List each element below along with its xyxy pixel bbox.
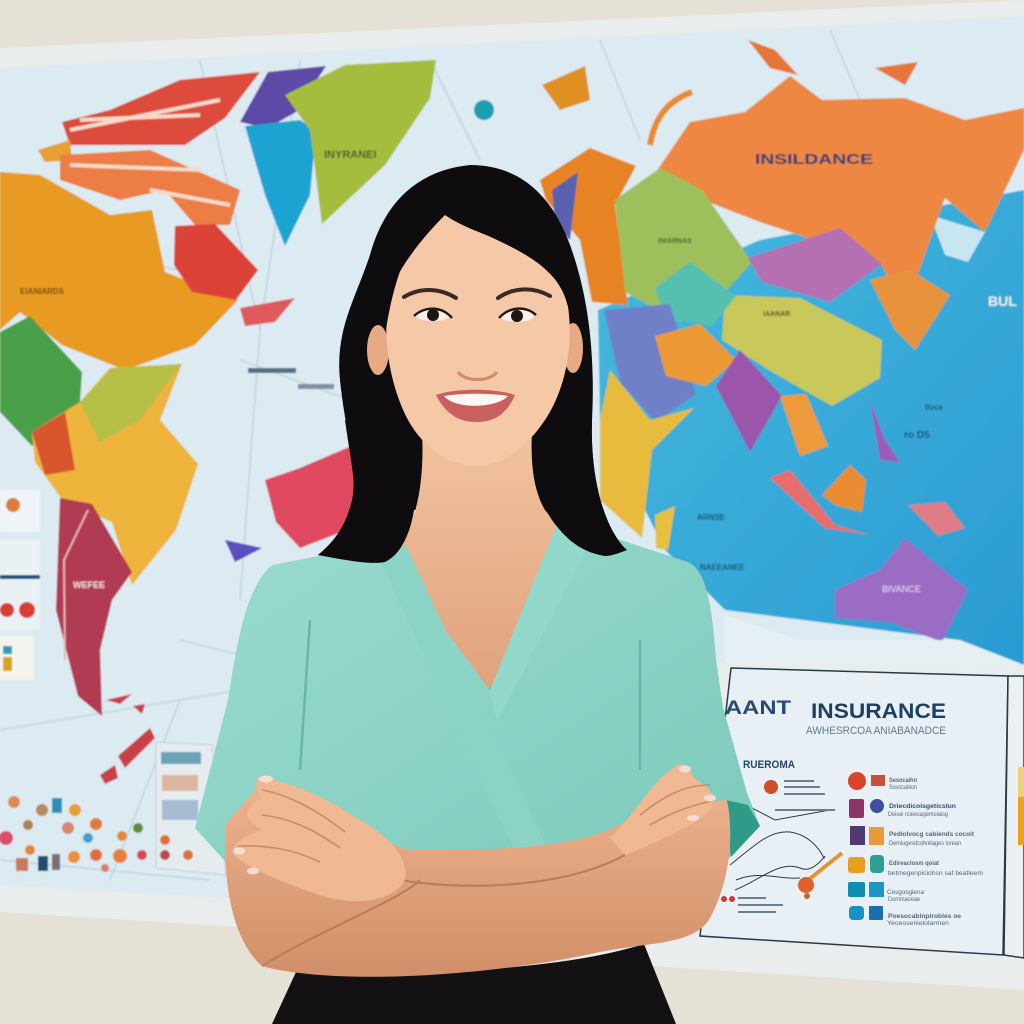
row captions xyxy=(887,777,984,927)
region: pale north-east coast xyxy=(930,215,985,262)
left column icons and captions xyxy=(721,780,835,913)
panel subheading: AWHESRCOA ANIABANADCE xyxy=(806,725,946,737)
illustration: sketch map with brush xyxy=(730,808,842,899)
ocean east xyxy=(598,190,1024,665)
ocean labels: Ilvce xyxy=(925,403,943,412)
ocean labels: BUL xyxy=(988,293,1017,309)
ear right xyxy=(563,323,583,373)
sleeve inner shadow xyxy=(726,800,760,857)
region: Australia purple: BIVANCE xyxy=(882,584,921,594)
region: south America maroon xyxy=(56,498,132,716)
region: Scandinavia blue xyxy=(552,172,578,240)
region: north red stripes xyxy=(38,72,260,225)
hair lock right xyxy=(532,420,627,556)
region: left orange continent: EIANIARDS xyxy=(20,287,65,296)
region: Europe orange xyxy=(540,148,636,305)
row captions: Demiogesdcohnitages lorean xyxy=(889,840,961,847)
hair lock left xyxy=(318,420,422,563)
row captions: Sosocabion xyxy=(889,784,917,791)
crossed arms xyxy=(225,782,730,977)
ocean labels xyxy=(697,293,1017,572)
hand left xyxy=(233,778,405,901)
panel heading main: INSURANCE xyxy=(811,700,946,723)
region: red block xyxy=(174,224,258,300)
grid lines xyxy=(0,30,860,880)
region: left orange continent xyxy=(0,172,238,370)
small icon panel xyxy=(156,742,226,875)
ocean labels: ro D5 xyxy=(904,430,930,441)
region: orange center xyxy=(655,324,736,386)
side panel chart bar xyxy=(1018,767,1024,845)
person xyxy=(195,165,760,1024)
top xyxy=(195,525,760,900)
region: central green: INIARNAS xyxy=(658,238,692,245)
hand right xyxy=(610,764,713,855)
row captions: Yeoeosenielolarmen xyxy=(887,920,949,927)
region: red island xyxy=(240,298,295,326)
region: orange right xyxy=(870,270,950,350)
region: teal xyxy=(655,262,736,326)
eyebrows xyxy=(404,289,550,298)
region: purple xyxy=(240,66,326,128)
nose xyxy=(458,372,497,380)
region: green with label: INYRANEI xyxy=(324,149,377,161)
neck and chest xyxy=(384,430,586,692)
region: Russia orange with title: INSILDANCE xyxy=(755,151,873,168)
scattered small marks xyxy=(225,100,494,562)
arm crease xyxy=(262,855,625,966)
row captions: Pedlolvocg cabiends cocoit xyxy=(889,831,975,838)
ocean labels: ARNSE xyxy=(697,513,726,522)
region: green south xyxy=(0,316,82,446)
top lapel right xyxy=(490,522,588,722)
region: south America yellow xyxy=(32,364,198,585)
region: islands xyxy=(770,400,965,536)
right column icon rows xyxy=(848,772,984,927)
ear left xyxy=(367,325,389,375)
panel section label: RUEROMA xyxy=(743,759,795,771)
region: Russia orange with title xyxy=(652,76,1024,310)
row captions: Deisei rcieesagemolaisg xyxy=(888,811,948,818)
row captions: Edireaclosm qoiat xyxy=(889,860,940,867)
face xyxy=(386,215,570,466)
panel heading: AANT xyxy=(725,698,791,719)
info panel: insurance xyxy=(700,668,1024,958)
region: blue violet xyxy=(604,304,696,422)
region: peninsula yellow xyxy=(655,506,675,550)
top wrap fold lines xyxy=(300,530,640,850)
row captions: Cesgosgiena xyxy=(887,889,924,896)
region: orange Indochina xyxy=(780,394,828,456)
islands xyxy=(100,694,155,784)
ocean labels: NAEEANEE xyxy=(700,563,745,572)
region: south America maroon: WEFEE xyxy=(73,580,105,590)
region: magenta xyxy=(748,228,882,302)
eyes xyxy=(414,309,536,322)
row captions: Poesocabinpirobles oe xyxy=(888,913,961,920)
region: east orange top fragments xyxy=(542,40,918,145)
row captions: betmegenpiciohsn saf beatleem xyxy=(888,870,984,877)
row captions: Sesocaihn xyxy=(889,777,917,784)
region: purple India xyxy=(716,350,782,452)
top lapel left xyxy=(378,545,548,852)
left legend boxes xyxy=(0,490,40,680)
bottom left icon cluster xyxy=(0,796,147,872)
top hair fringe xyxy=(368,180,572,330)
region: blue xyxy=(245,120,316,246)
nails xyxy=(233,766,716,874)
region: yellow Africa xyxy=(600,370,694,538)
finger lines xyxy=(238,785,715,862)
row captions: Dommaceae xyxy=(888,896,920,903)
region: central green xyxy=(615,168,752,322)
south white land xyxy=(725,615,1024,665)
panel side xyxy=(1004,676,1024,958)
mouth xyxy=(436,390,515,422)
region: green with label xyxy=(285,60,436,224)
region: Australia purple xyxy=(835,538,968,642)
region: pink xyxy=(265,444,360,548)
row captions: Driecdicoisgeticslun xyxy=(889,803,956,810)
hair back xyxy=(318,165,627,563)
skirt xyxy=(272,944,676,1024)
region: olive xyxy=(722,295,882,406)
region: olive: IAANAR xyxy=(763,311,790,318)
